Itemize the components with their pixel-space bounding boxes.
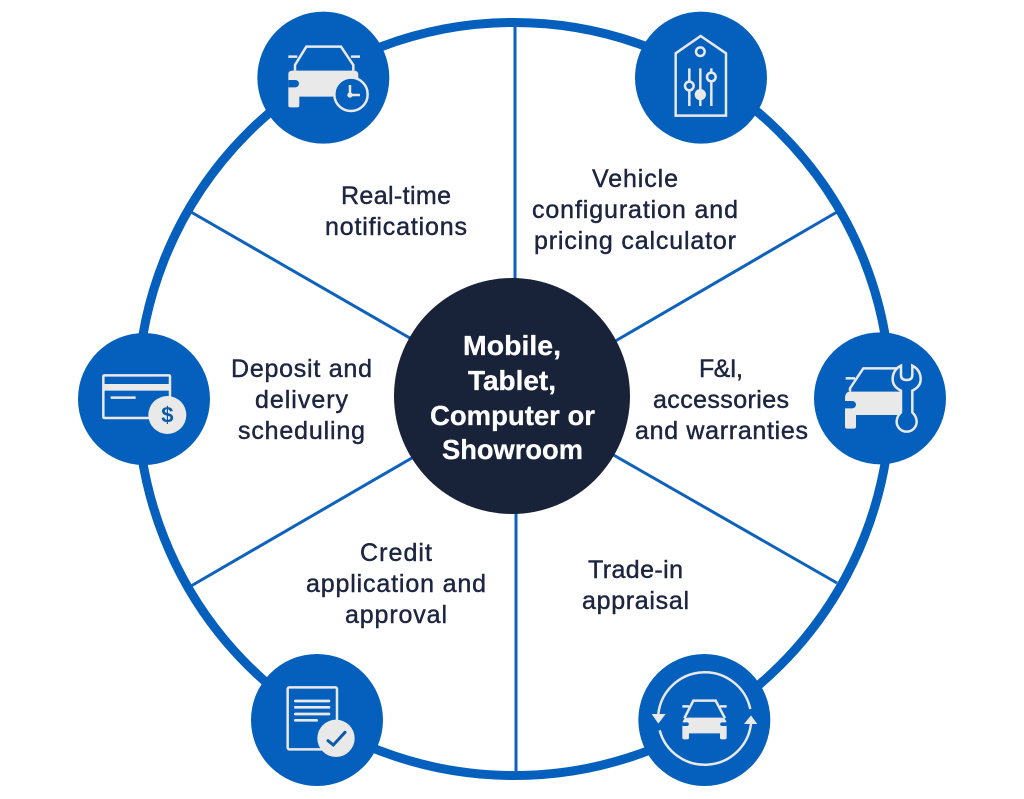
label: trade-in appraisal — [582, 556, 689, 615]
label: credit application and approval: application and — [306, 570, 486, 598]
label: credit application and approval: approval — [345, 601, 447, 629]
label: vehicle configuration and pricing calculator: configuration and — [532, 196, 738, 224]
hub label: Mobile, — [463, 330, 561, 361]
label: credit application and approval — [306, 539, 486, 629]
label: deposit and delivery scheduling: scheduling — [238, 417, 365, 445]
hub label: Showroom — [442, 434, 583, 465]
label: F&I, accessories and warranties — [635, 355, 808, 445]
icon: credit card with dollar: $ — [161, 403, 173, 428]
hub label: Computer or — [430, 400, 595, 431]
icon: car with circular arrows — [638, 654, 770, 786]
label: real-time notifications: notifications — [325, 213, 467, 241]
label: real-time notifications — [325, 182, 467, 241]
hub label — [430, 330, 595, 465]
label: credit application and approval: Credit — [360, 539, 432, 567]
hub label: Tablet, — [468, 365, 556, 396]
label: trade-in appraisal: Trade-in — [588, 556, 683, 584]
outer ring — [138, 22, 890, 776]
label: real-time notifications: Real-time — [341, 182, 451, 210]
label: vehicle configuration and pricing calculator: Vehicle — [592, 165, 678, 193]
label: F&I, accessories and warranties: F&I, — [699, 355, 743, 383]
label: F&I, accessories and warranties: and warranties — [635, 417, 808, 445]
label: F&I, accessories and warranties: accessories — [653, 386, 789, 414]
label: vehicle configuration and pricing calculator: pricing calculator — [534, 227, 736, 255]
label: trade-in appraisal: appraisal — [582, 587, 689, 615]
label: deposit and delivery scheduling: Deposit and — [231, 355, 372, 383]
center hub — [394, 278, 630, 514]
icon: car with wrench — [814, 332, 946, 464]
label: deposit and delivery scheduling: delivery — [255, 386, 348, 414]
icon: price tag with sliders — [635, 12, 767, 144]
icon: document with check mark — [251, 654, 383, 786]
spokes — [191, 25, 837, 773]
icon: car with clock — [257, 12, 389, 144]
label: vehicle configuration and pricing calculator — [532, 165, 738, 255]
label: deposit and delivery scheduling — [231, 355, 372, 445]
icon: credit card with dollar — [78, 333, 210, 465]
